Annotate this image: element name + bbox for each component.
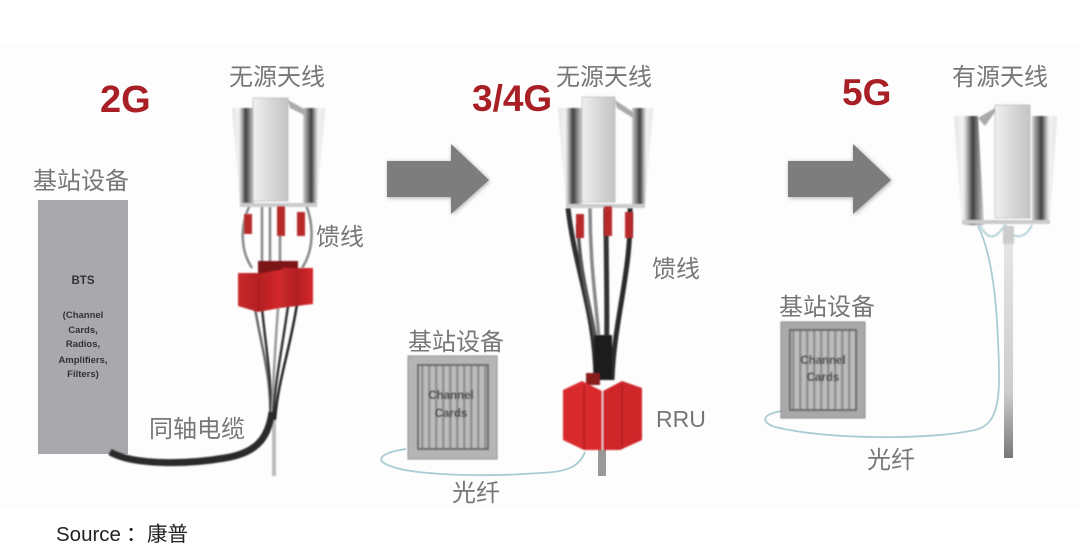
BTS cabinet: Amplifiers, <box>58 355 108 366</box>
fiber <box>381 449 585 475</box>
pole <box>1004 240 1013 458</box>
BTS cabinet: Cards, <box>68 325 98 336</box>
BTS cabinet: Radios, <box>66 339 100 350</box>
label: passive antenna: 无源天线 <box>229 64 325 91</box>
panel: 2G <box>33 64 364 476</box>
panel: 3/4G <box>381 64 706 507</box>
feeder cables <box>568 208 630 380</box>
arrow <box>387 144 489 214</box>
label: 有源天线 <box>952 64 1048 91</box>
5G antenna <box>954 105 1057 244</box>
base station unit <box>408 356 497 459</box>
base station unit: Cards <box>435 408 467 420</box>
label: passive antenna: 无源天线 <box>556 64 652 91</box>
label: 基站设备 <box>779 294 875 321</box>
feeder label: 馈线 <box>316 224 364 251</box>
base station unit: Cards <box>807 372 839 384</box>
source: ： <box>126 523 146 546</box>
BTS cabinet: BTS <box>72 275 95 287</box>
label: base station: 基站设备 <box>33 168 129 195</box>
source: 康普 <box>147 523 188 546</box>
fiber label: 光纤 <box>867 447 915 474</box>
BTS cabinet: (Channel <box>63 310 103 321</box>
BTS cabinet <box>38 200 128 454</box>
label: coaxial cable: 同轴电缆 <box>149 416 245 443</box>
fiber label: 光纤 <box>452 480 500 507</box>
3/4G antenna <box>558 97 653 238</box>
label: 基站设备 <box>408 329 504 356</box>
RRU <box>563 373 642 450</box>
heading: 5G <box>842 72 891 113</box>
heading: 3/4G <box>472 78 552 119</box>
arrow <box>788 144 891 214</box>
base station unit <box>781 322 865 418</box>
pole <box>598 445 606 476</box>
BTS cabinet: Filters) <box>67 369 99 380</box>
2G antenna <box>232 98 325 270</box>
2G red connector <box>238 261 313 312</box>
base station unit: Channel <box>800 355 846 367</box>
coaxial cable <box>110 304 297 476</box>
source: Source <box>56 523 121 546</box>
feeder label: 馈线 <box>652 256 700 283</box>
base station unit: Channel <box>428 390 474 402</box>
RRU label: RRU <box>656 406 706 432</box>
panel: 5G <box>765 64 1057 474</box>
fiber <box>765 226 999 437</box>
heading: 2G: 2G <box>100 79 151 121</box>
